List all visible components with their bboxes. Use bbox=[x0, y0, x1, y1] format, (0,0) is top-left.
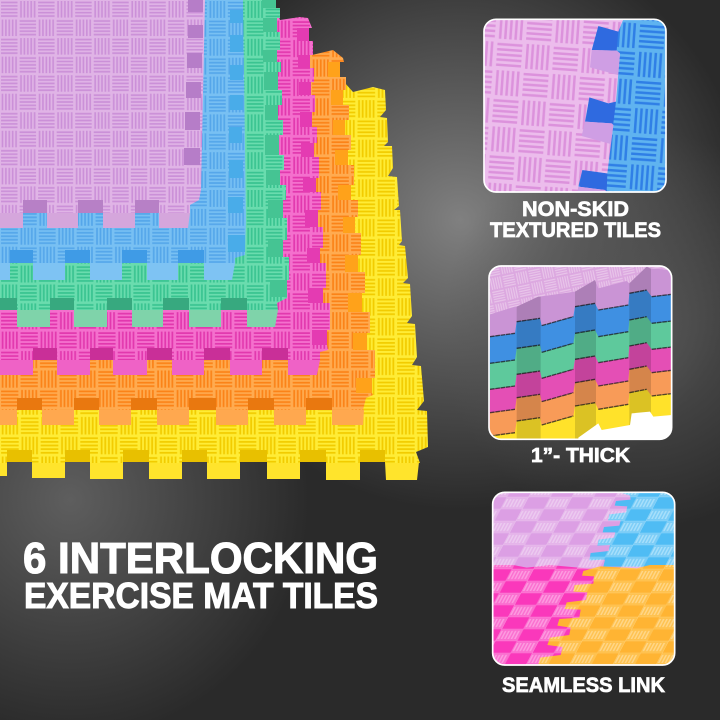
green mat bbox=[0, 0, 289, 327]
panel: non-skid texture close-up bbox=[484, 19, 666, 192]
title: EXERCISE MAT TILES bbox=[24, 575, 378, 616]
label: non-skid textured tiles: NON-SKID bbox=[522, 198, 629, 221]
panel: thickness of stacked layers bbox=[488, 265, 672, 440]
lilac mat bbox=[0, 0, 205, 228]
orange mat bbox=[0, 40, 375, 425]
yellow mat bbox=[0, 83, 428, 480]
pink mat bbox=[0, 10, 330, 375]
panel: four tiles seamlessly linked bbox=[493, 492, 675, 665]
title: 6 INTERLOCKING bbox=[23, 534, 378, 583]
stack of six mat tiles bbox=[0, 0, 428, 480]
label: non-skid textured tiles: TEXTURED TILES bbox=[490, 219, 661, 242]
label: seamless link: SEAMLESS LINK bbox=[502, 674, 665, 697]
label: non-skid textured tiles bbox=[490, 198, 661, 242]
label: thickness: 1”- THICK bbox=[531, 444, 630, 467]
title bbox=[23, 534, 378, 616]
blue mat bbox=[0, 0, 246, 280]
